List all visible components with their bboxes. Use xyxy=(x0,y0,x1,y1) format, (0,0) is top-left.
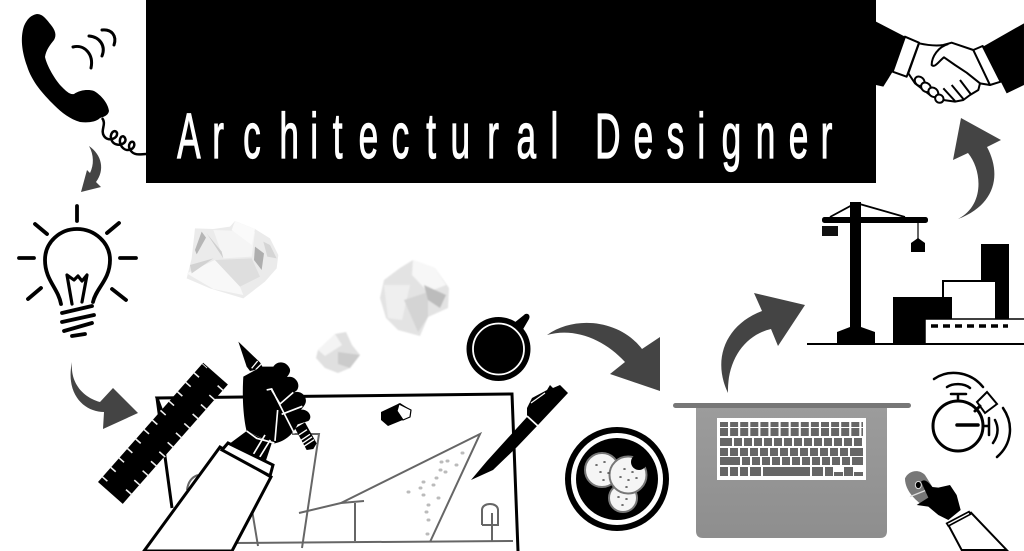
front building xyxy=(925,319,1024,344)
shirt sleeve xyxy=(144,447,271,551)
wrist xyxy=(230,431,272,463)
crumpled paper large xyxy=(187,221,278,298)
arrow: phone to idea xyxy=(81,146,101,192)
right sleeve xyxy=(980,23,1024,93)
dark building xyxy=(893,297,952,344)
drawing sheet xyxy=(157,394,518,551)
keyboard xyxy=(717,418,866,480)
clasped hands xyxy=(908,43,990,102)
icon: stopwatch xyxy=(933,373,1010,457)
eraser xyxy=(381,403,411,426)
mouse xyxy=(905,471,933,507)
thumb and finger lines xyxy=(932,44,980,101)
laptop base xyxy=(696,405,887,538)
construction scene xyxy=(807,202,1024,344)
icon: light bulb xyxy=(19,206,136,336)
finger and pencil highlights xyxy=(247,389,302,458)
pencil tip xyxy=(238,342,263,371)
tall building xyxy=(981,244,1009,320)
plate of cookies xyxy=(565,427,669,531)
pencil end xyxy=(295,422,317,450)
crumpled paper medium xyxy=(380,260,449,336)
laptop hinge xyxy=(673,403,911,408)
cookie bitten xyxy=(610,456,646,494)
icon: handshake xyxy=(876,22,1024,105)
crumpled paper small xyxy=(316,332,360,373)
phone cord xyxy=(102,118,146,154)
fist xyxy=(243,362,310,444)
ruler xyxy=(98,363,228,504)
arrow: desk to laptop xyxy=(547,323,660,391)
ground line xyxy=(807,343,1024,345)
window row xyxy=(931,324,1008,328)
left sleeve xyxy=(876,22,905,87)
sound waves xyxy=(73,30,115,68)
arrow: construction to handshake xyxy=(953,118,1001,219)
crane xyxy=(822,202,928,343)
sketch shading dots xyxy=(408,453,463,534)
mouse sleeve xyxy=(948,513,1007,550)
left cuff xyxy=(893,37,919,77)
hand holding pencil xyxy=(144,342,317,551)
coffee cup xyxy=(466,314,530,381)
arrow: idea to drawing xyxy=(71,362,138,429)
pencil sketch of building xyxy=(187,434,513,548)
fingers xyxy=(913,75,945,105)
pen xyxy=(471,385,568,480)
laptop xyxy=(673,403,911,538)
title text: Architectural Designer xyxy=(177,100,832,172)
right cuff xyxy=(973,46,1001,85)
icon: telephone xyxy=(22,14,146,154)
title banner xyxy=(146,0,876,183)
mouse cuff xyxy=(947,512,970,526)
hand on mouse xyxy=(905,471,1007,550)
mouse hand xyxy=(917,480,961,520)
outlined building xyxy=(943,281,996,321)
shirt cuff xyxy=(222,443,273,476)
arrow: laptop to construction xyxy=(721,293,805,393)
cookie left xyxy=(585,453,619,487)
cookie bottom xyxy=(609,484,637,512)
